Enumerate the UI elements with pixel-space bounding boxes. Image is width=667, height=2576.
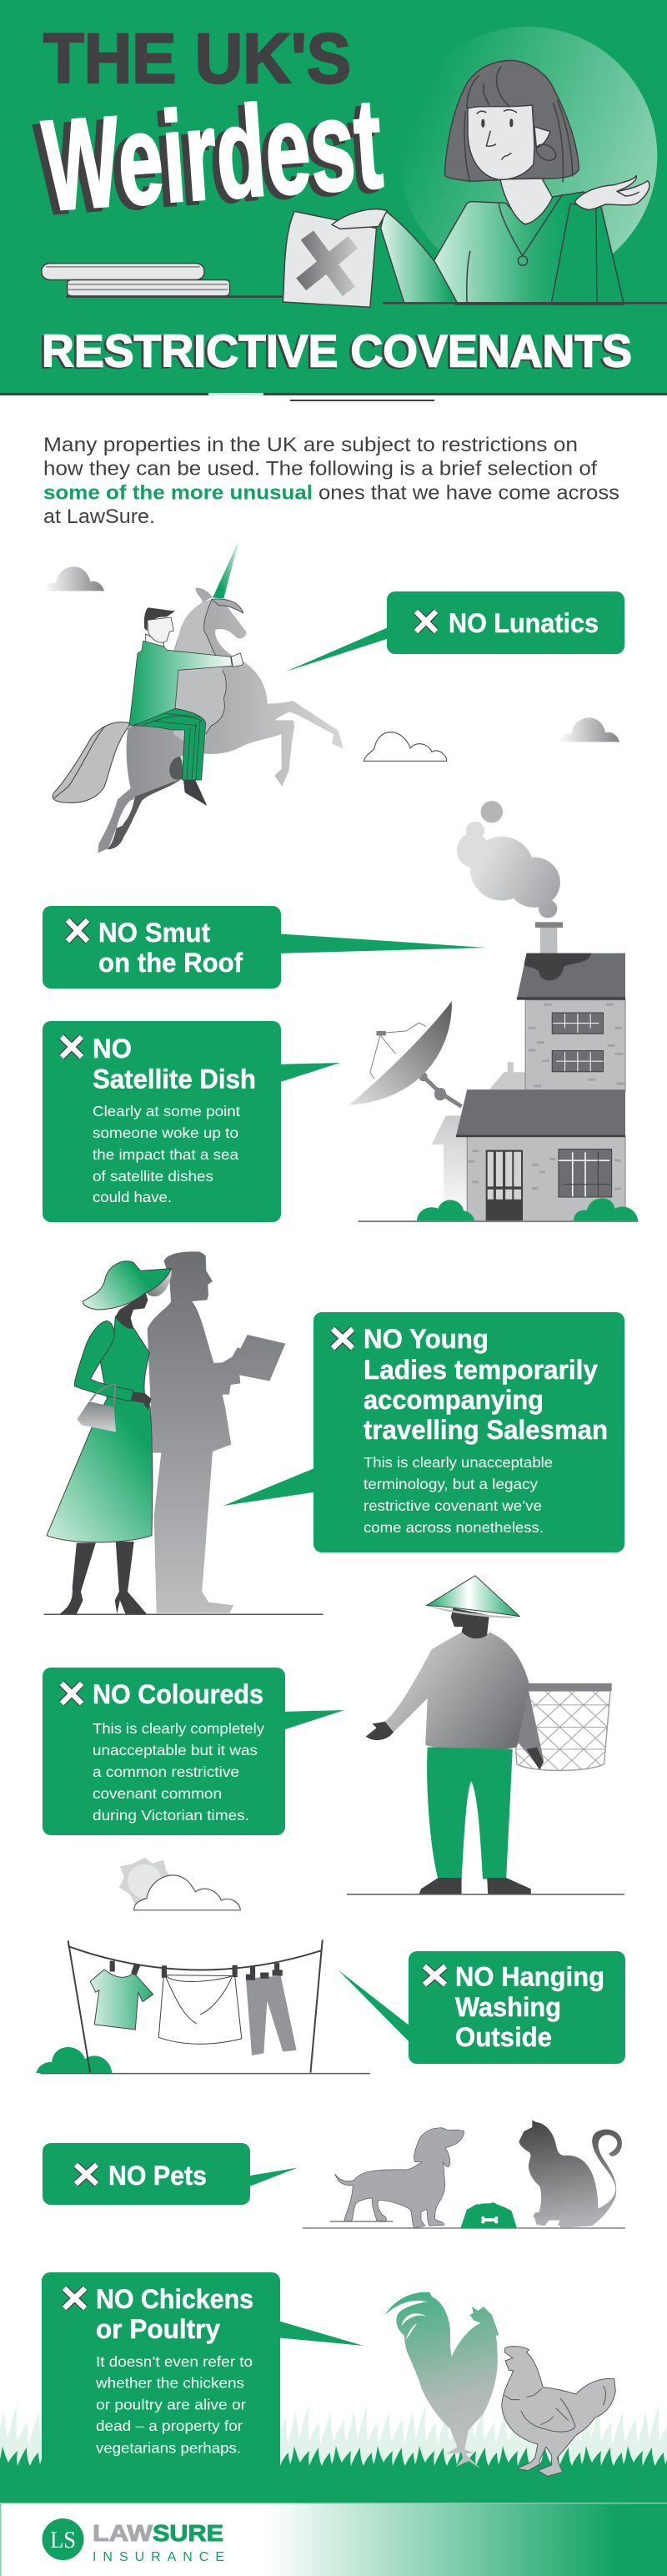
icon: cross [62,1037,82,1057]
illustration: man riding unicorn with clouds [43,540,619,853]
panel: no coloureds: unacceptable but it was [93,1742,258,1758]
illustration: house with smoke and satellite dish [349,801,638,1221]
panel: no hanging washing outside [338,1951,625,2064]
panel: no lunatics [286,591,624,672]
panel: no coloureds: covenant common [93,1785,222,1802]
panel: no pets: NO Pets [108,2161,207,2191]
panel: no young ladies: travelling Salesman [364,1415,608,1445]
panel: no satellite dish: Satellite Dish [93,1064,256,1094]
panel: no coloureds: This is clearly completely [93,1720,264,1737]
logo: LawSure Insurance: LS [50,2527,76,2553]
text: introduction: ones that we have come across [318,482,619,504]
panel: no young ladies: terminology, but a legacy [364,1476,538,1492]
icon: cross [64,2288,85,2308]
title: Weirdest [31,71,387,242]
panel: no young ladies: Ladies temporarily [364,1355,598,1385]
text: introduction: Many properties in the UK are subject to restrictions on [43,434,578,456]
panel: no chickens or poultry: or Poultry [96,2314,220,2344]
panel: no satellite dish [43,1021,340,1222]
panel: no smut on the roof: on the Roof [98,948,243,978]
panel: no young ladies: This is clearly unacceptable [364,1454,553,1471]
panel: no lunatics: NO Lunatics [449,608,599,638]
panel: no satellite dish: someone woke up to [93,1124,238,1141]
panel: no chickens or poultry: dead – a property for [96,2418,243,2434]
panel: no hanging washing outside: Washing [455,1992,561,2022]
panel: no chickens or poultry: whether the chickens [95,2374,244,2391]
icon: cross [62,1683,82,1703]
logo: LawSure Insurance [42,2518,224,2564]
text: introduction: how they can be used. The following is a brief selection of [43,457,597,480]
panel: no young ladies: come across nonetheless. [364,1519,544,1536]
logo: LawSure Insurance: SURE [153,2520,223,2546]
panel: no smut on the roof: NO Smut [98,918,210,948]
icon: cross [416,611,436,631]
text: introduction [43,434,619,528]
panel: footer [0,2503,667,2576]
title: Restrictive Covenants: RESTRICTIVE COVENANTS [42,325,632,377]
panel: no chickens or poultry [42,2272,364,2481]
panel: no satellite dish: Clearly at some point [93,1103,240,1119]
title: The UK's: THE UK'S [43,19,351,98]
illustration: man in conical hat with basket [347,1576,624,1894]
panel: no young ladies [223,1312,624,1552]
illustration: grass strip [0,2402,667,2503]
panel: no satellite dish: the impact that a sea [93,1146,238,1163]
icon: cross [424,1966,445,1985]
illustration: woman with crossed document [42,27,667,307]
panel: no coloureds: NO Coloureds [93,1679,263,1709]
panel: no coloureds: a common restrictive [93,1763,239,1780]
panel: no young ladies: NO Young [364,1324,489,1354]
panel: no smut on the roof [43,906,486,989]
panel: no satellite dish: could have. [93,1189,172,1205]
panel: no chickens or poultry: or poultry are alive or [96,2396,246,2412]
panel: no young ladies: accompanying [364,1385,544,1415]
title: Weirdest: Weirdest [38,71,386,238]
panel: header [0,0,667,401]
panel: no chickens or poultry: vegetarians perhaps. [96,2439,241,2456]
panel: no hanging washing outside: NO Hanging [455,1962,604,1992]
title: Restrictive Covenants: RESTRICTIVE COVENANTS [40,326,630,378]
panel: no chickens or poultry: It doesn’t even refer to [96,2353,253,2370]
illustration: sun and cloud [119,1858,240,1910]
logo: LawSure Insurance: LAW [93,2520,153,2546]
panel: no pets [43,2143,298,2205]
illustration: washing line [36,1940,370,2074]
panel: no hanging washing outside: Outside [455,2022,552,2052]
title: Weirdest: Weirdest [32,74,381,242]
panel: no satellite dish: NO [93,1034,132,1064]
panel: no satellite dish: of satellite dishes [93,1168,213,1185]
text: introduction: at LawSure. [43,506,155,528]
panel: no coloureds [43,1668,344,1835]
logo: LawSure Insurance: INSURANCE [93,2550,224,2564]
icon: cross [333,1329,353,1348]
illustration: dog, cat and bowl [303,2121,625,2228]
panel: no coloureds: during Victorian times. [93,1807,249,1824]
text: introduction: some of the more unusual [43,482,313,504]
icon: cross [68,920,88,941]
illustration: woman and salesman [44,1251,323,1614]
panel: no chickens or poultry: NO Chickens [96,2284,253,2314]
illustration: rooster and hen [385,2292,615,2476]
icon: cross [76,2165,97,2184]
panel: no young ladies: restrictive covenant we’ve [364,1497,542,1514]
